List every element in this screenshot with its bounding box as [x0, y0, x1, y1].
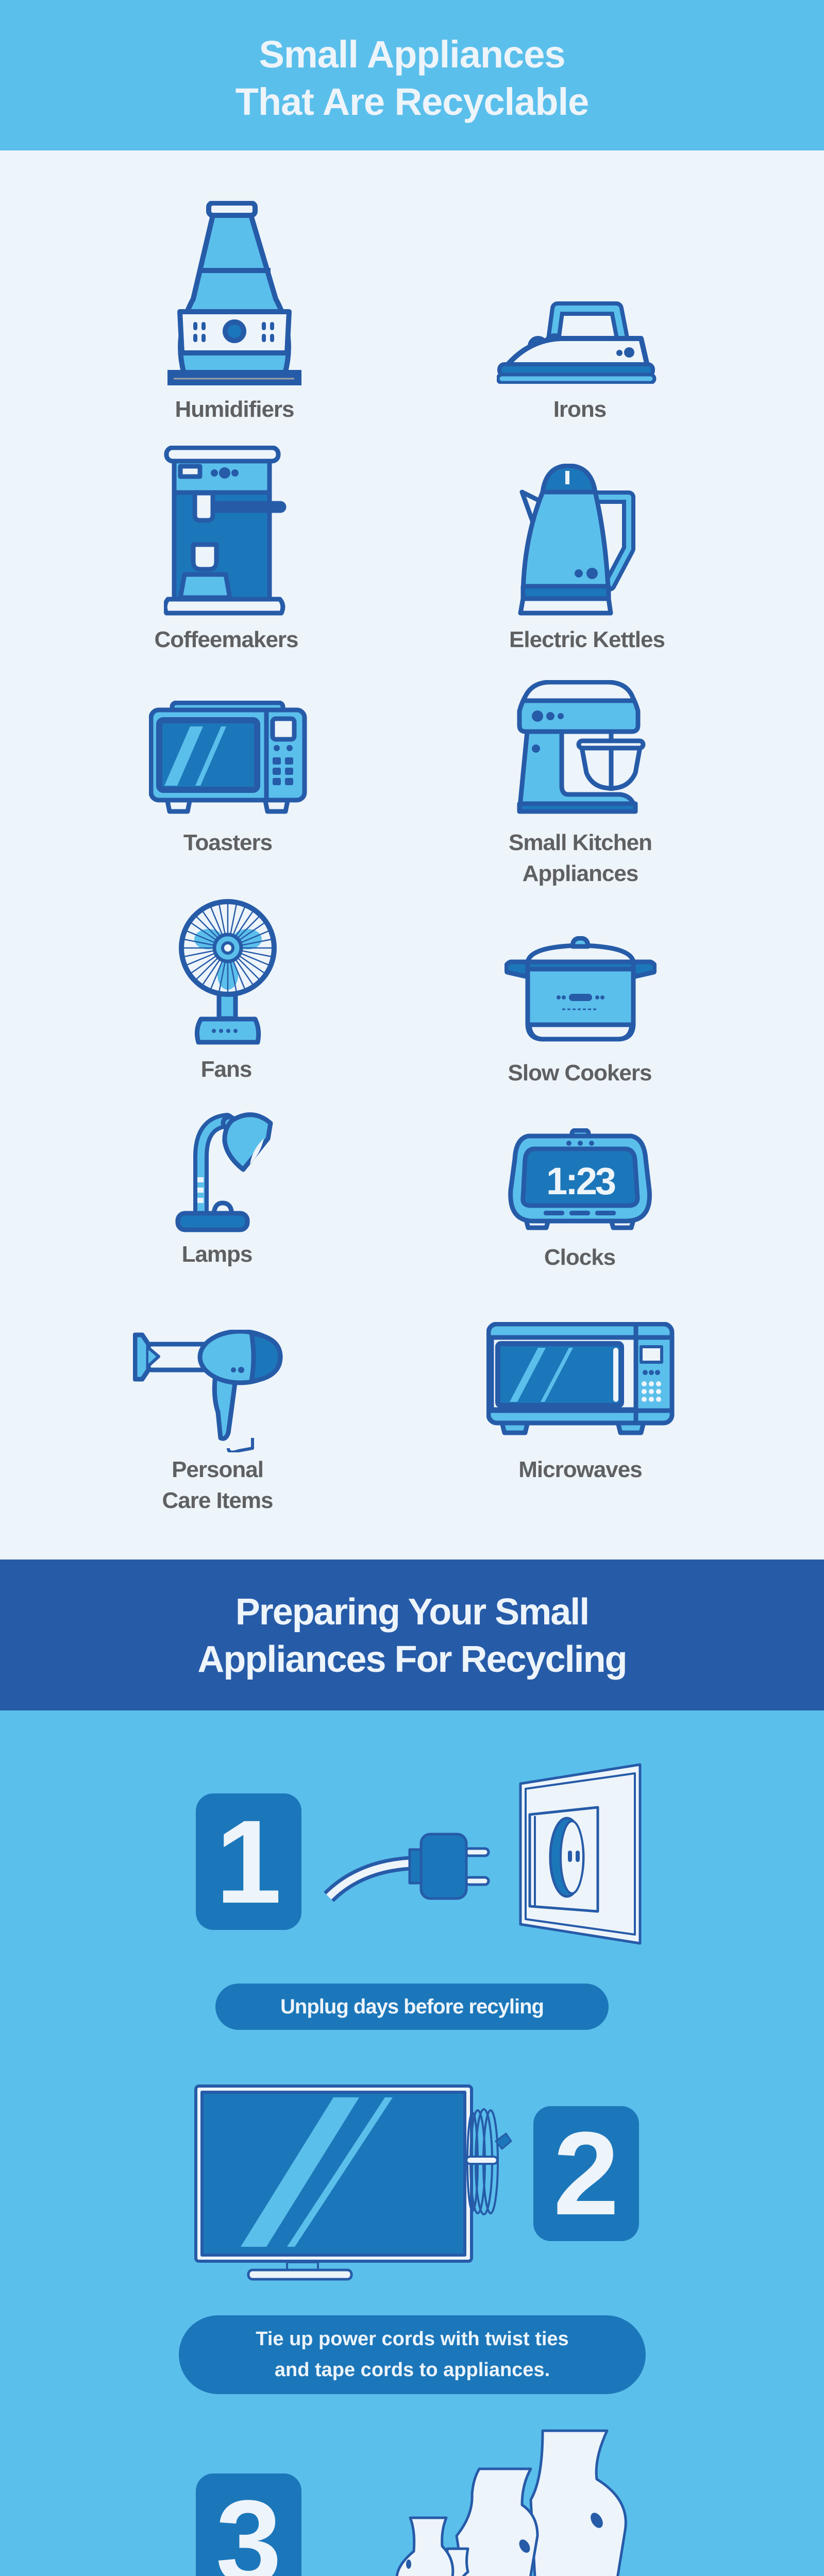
step 3 number [196, 2473, 301, 2576]
icon: iron [497, 301, 657, 384]
label: small kitchen appliances: Appliances [523, 861, 638, 886]
pill: step 2 text: and tape cords to appliances. [275, 2359, 550, 2381]
title: Small Appliances [259, 33, 565, 76]
icon: clock: 1:23 [546, 1160, 615, 1202]
label: microwaves: Microwaves [518, 1457, 642, 1482]
icon: vases [396, 2430, 627, 2576]
icon: coffeemaker [164, 446, 287, 615]
label: personal care items: Personal [172, 1457, 263, 1482]
icon: plug and outlet [324, 1763, 641, 1944]
icon: tv with tied cord [194, 2084, 512, 2280]
panel: steps [0, 1710, 824, 2576]
icon: microwave [486, 1322, 674, 1435]
label: coffeemakers: Coffeemakers [154, 627, 298, 652]
header band: preparing [0, 1560, 824, 1710]
pill: step 2 text [179, 2315, 646, 2394]
label: clocks: Clocks [544, 1245, 615, 1270]
label: fans: Fans [201, 1057, 251, 1082]
pill: step 1 text: Unplug days before recyling [280, 1995, 544, 2018]
title [197, 1591, 627, 1680]
label: slow cookers: Slow Cookers [508, 1060, 651, 1086]
icon: electric kettle [518, 464, 635, 615]
label: irons: Irons [553, 397, 606, 422]
step 2 number: 2 [553, 2107, 619, 2240]
label: humidifiers: Humidifiers [175, 397, 294, 422]
pill: step 1 text [215, 1984, 609, 2030]
label: personal care items [162, 1457, 273, 1513]
icon: lamp [175, 1112, 273, 1232]
step 2 number [533, 2106, 639, 2241]
pill: step 2 text: Tie up power cords with twist ties [256, 2328, 569, 2350]
icon: fan [179, 899, 277, 1045]
title: Preparing Your Small [236, 1591, 588, 1633]
title: That Are Recyclable [236, 80, 588, 123]
icon: toaster [149, 701, 307, 814]
header band: small appliances [0, 0, 824, 150]
label: small kitchen appliances: Small Kitchen [509, 830, 652, 855]
label: lamps: Lamps [182, 1242, 252, 1267]
title: Appliances For Recycling [197, 1639, 627, 1680]
icon: clock [508, 1128, 652, 1230]
step 1 number: 1 [216, 1795, 281, 1928]
icon: hair dryer [133, 1330, 282, 1452]
icon: humidifier [167, 201, 301, 385]
step 1 number [196, 1793, 301, 1930]
icon: slow cooker [505, 936, 657, 1042]
label: small kitchen appliances [509, 830, 652, 886]
icon: stand mixer [517, 680, 645, 814]
label: personal care items: Care Items [162, 1488, 273, 1513]
label: electric kettles: Electric Kettles [509, 627, 665, 652]
label: toasters: Toasters [183, 830, 272, 855]
title [236, 33, 588, 123]
